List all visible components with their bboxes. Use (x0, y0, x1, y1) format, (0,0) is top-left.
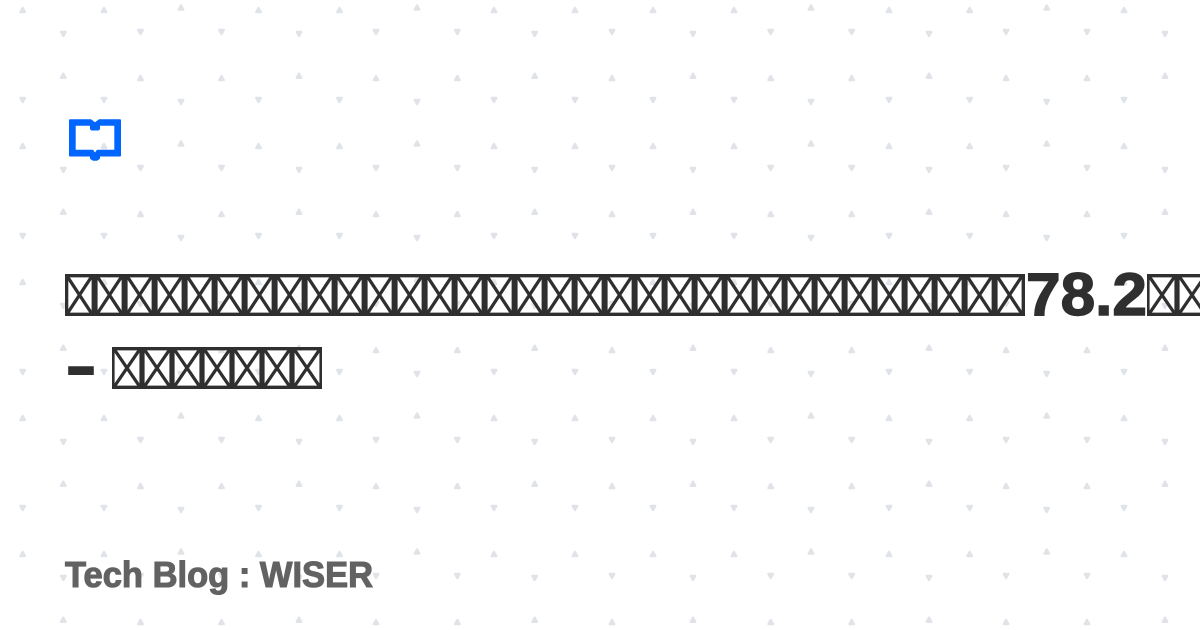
title line 1: 78.2 (1026, 261, 1147, 328)
title line 2 (64, 323, 322, 405)
title line 2: - (64, 323, 98, 405)
title (64, 261, 1200, 405)
blog name: Tech Blog : WISER (65, 554, 373, 595)
title line 1 (65, 261, 1200, 328)
icon: open book (69, 119, 121, 161)
